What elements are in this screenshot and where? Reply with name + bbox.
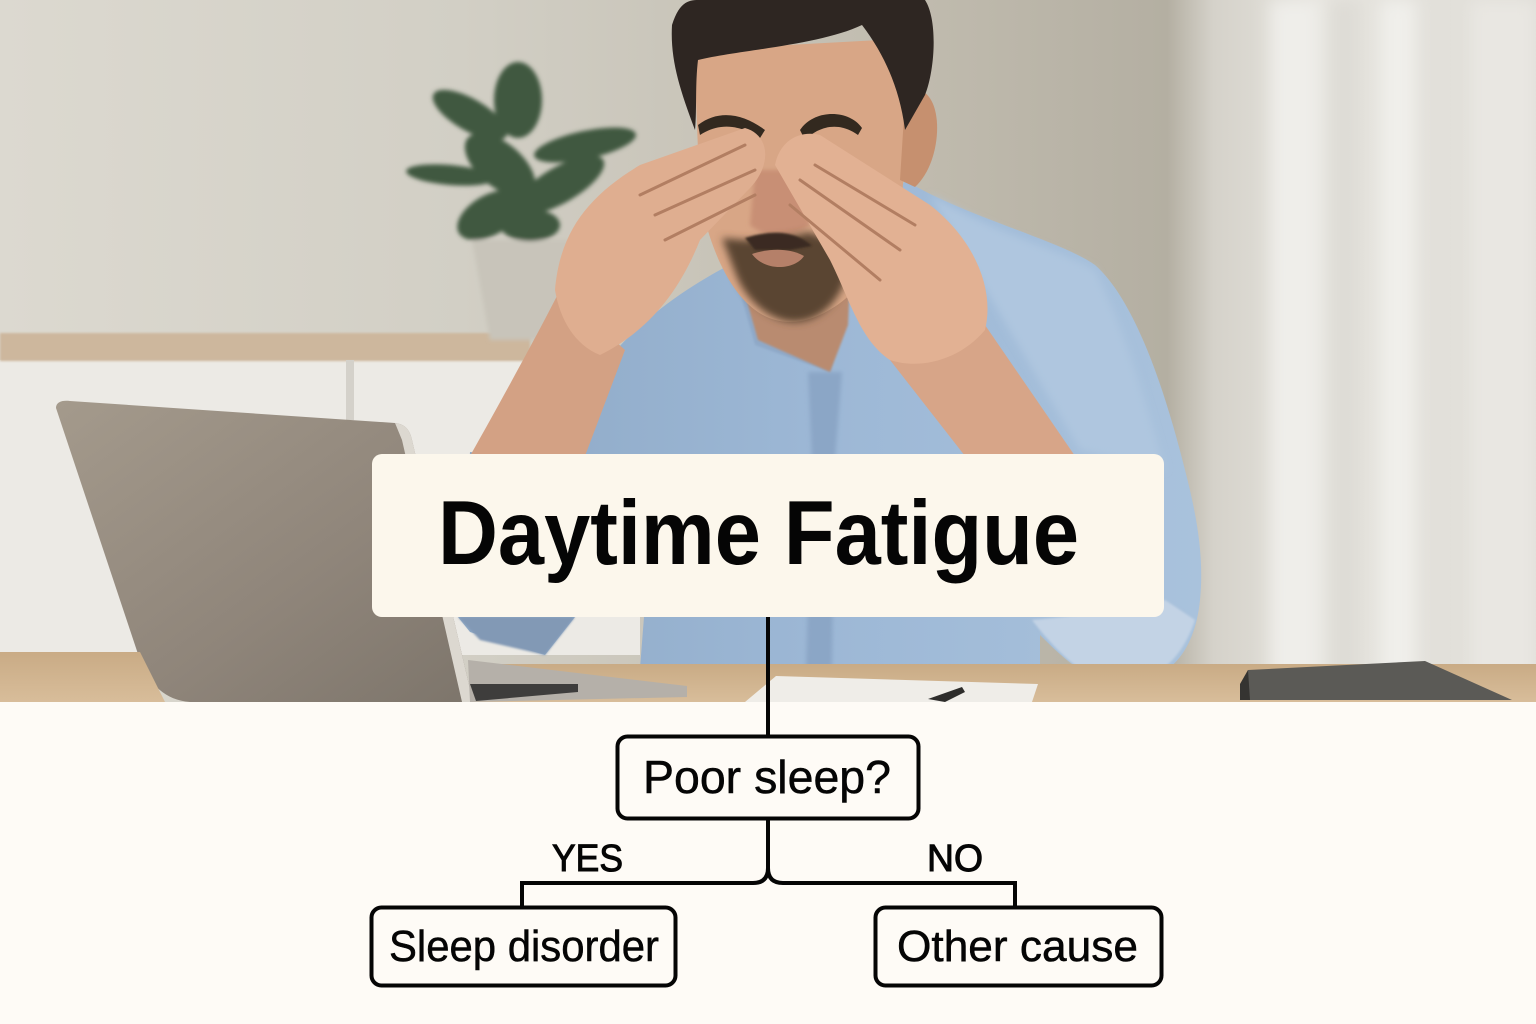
shoulder highlight	[930, 195, 1165, 470]
title: Daytime Fatigue	[438, 483, 1079, 584]
outcome box: Other cause	[876, 908, 1162, 986]
fingers	[640, 145, 915, 280]
person rubbing eyes	[458, 0, 1201, 684]
branch label: YES: YES	[552, 838, 623, 880]
notebook	[1240, 661, 1512, 700]
title card	[372, 454, 1164, 617]
rolled right cuff	[1032, 600, 1195, 683]
laptop base and keyboard	[468, 660, 687, 702]
plant	[405, 62, 639, 340]
laptop	[56, 401, 473, 702]
right forearm	[890, 325, 1075, 456]
nose	[750, 170, 810, 236]
background photo: office scene	[0, 0, 1536, 702]
eyebrows	[698, 115, 765, 138]
outcome box: Sleep disorder: Sleep disorder	[389, 922, 659, 971]
lower cream panel	[0, 702, 1536, 1024]
face	[694, 40, 906, 322]
shirt	[458, 180, 1201, 684]
ear	[900, 90, 937, 187]
right hand	[775, 134, 988, 364]
neck	[738, 270, 850, 372]
curtain	[1270, 0, 1536, 702]
left cuff	[458, 617, 575, 655]
outcome box: Other cause: Other cause	[897, 922, 1138, 971]
decision box: Poor sleep?: Poor sleep?	[643, 751, 891, 803]
hair	[672, 0, 934, 130]
flowchart connectors	[522, 616, 1015, 907]
shelf and white cabinet	[0, 333, 640, 655]
beard and mustache	[722, 232, 848, 322]
paper and pen	[745, 676, 1038, 702]
left forearm	[470, 290, 625, 456]
decision box: Poor sleep?	[618, 736, 918, 818]
lips	[752, 250, 804, 267]
desk	[0, 652, 1536, 702]
branch label: NO: NO	[927, 838, 983, 880]
collar and placket	[735, 275, 840, 372]
outcome box: Sleep disorder	[372, 908, 676, 986]
left hand	[555, 128, 765, 355]
